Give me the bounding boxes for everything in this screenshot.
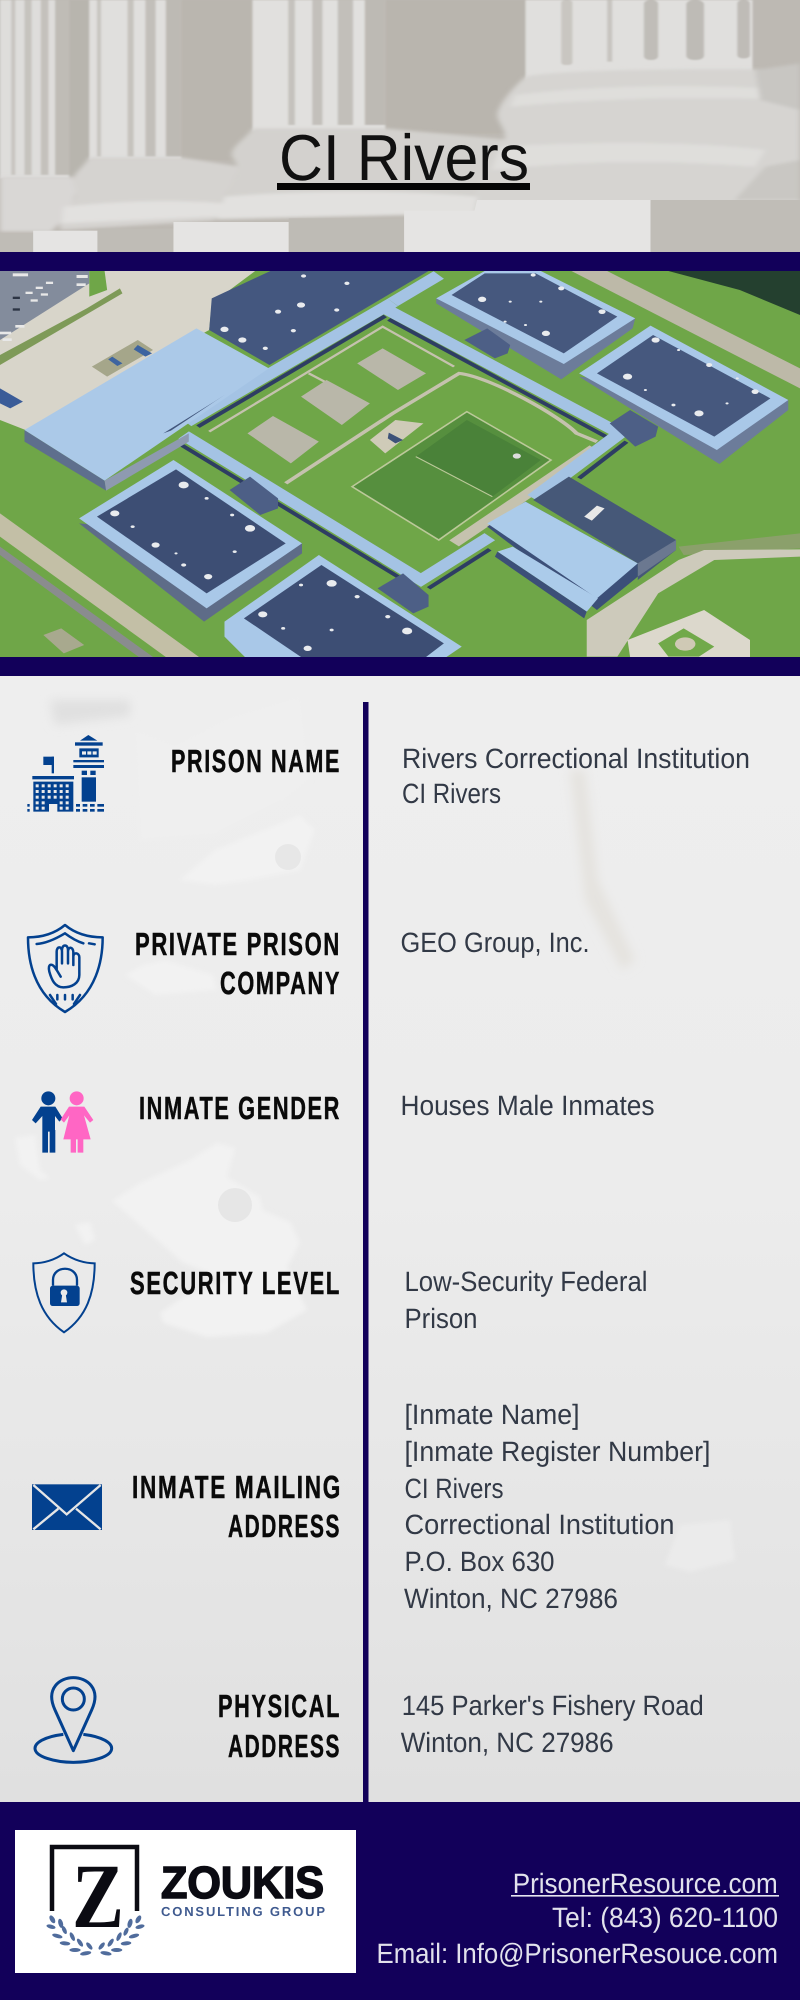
label: physical address: ADDRESS <box>228 1728 341 1764</box>
housing block NE2 <box>579 326 788 464</box>
value: security level: Prison <box>404 1303 478 1334</box>
label: private prison company <box>135 926 341 1001</box>
value: physical address <box>401 1690 704 1758</box>
row: security level <box>33 1253 647 1334</box>
value: inmate mailing address: [Inmate Name] <box>404 1399 580 1430</box>
parked cars <box>0 273 88 341</box>
label: inmate mailing address: ADDRESS <box>228 1508 341 1544</box>
value: physical address: 145 Parker's Fishery Road <box>402 1690 704 1721</box>
icon: envelope <box>32 1484 102 1530</box>
label: inmate mailing address: INMATE MAILING <box>132 1469 342 1505</box>
row: inmate gender <box>32 1090 654 1153</box>
column bases <box>0 63 800 232</box>
housing block SW2 <box>224 555 462 657</box>
row: private prison company <box>28 925 590 1012</box>
label: private prison company: COMPANY <box>220 965 341 1001</box>
icon: prison building and watchtower <box>27 735 104 812</box>
paper-textured information panel <box>0 676 800 1802</box>
value: prison name: CI Rivers <box>402 778 501 809</box>
sports field <box>352 412 551 540</box>
row: physical address <box>35 1678 704 1764</box>
column 3 <box>253 0 385 132</box>
contact details: PrisonerResource.com <box>513 1868 778 1899</box>
column 4 <box>526 0 753 80</box>
administration roof <box>24 328 269 481</box>
small annex buildings <box>230 328 658 613</box>
column 1 <box>0 0 69 178</box>
corridors shadow <box>176 316 627 588</box>
value: private prison company: GEO Group, Inc. <box>400 927 590 958</box>
yard paths <box>209 327 597 543</box>
value: physical address: Winton, NC 27986 <box>401 1727 614 1758</box>
value: inmate mailing address: [Inmate Register Number] <box>404 1436 710 1467</box>
dark-roof housing block top center <box>209 271 429 365</box>
plinths <box>0 233 33 252</box>
south-west perimeter <box>0 513 199 657</box>
contact details: Tel: (843) 620-1100 <box>552 1902 778 1933</box>
logo letter Z: Z <box>72 1845 124 1947</box>
label: private prison company: PRIVATE PRISON <box>135 926 341 962</box>
value: security level: Low-Security Federal <box>404 1266 648 1297</box>
baseball diamond <box>628 610 750 657</box>
value: prison name: Rivers Correctional Institution <box>402 743 750 774</box>
navy band below photo <box>0 657 800 676</box>
value: inmate mailing address: Correctional Institution <box>404 1509 674 1540</box>
label: security level: SECURITY LEVEL <box>130 1265 341 1301</box>
logo: Zoukis Consulting Group <box>15 1830 356 1973</box>
icon: male and female figures <box>32 1091 93 1153</box>
vertical divider <box>363 702 368 1802</box>
footer <box>0 1802 800 2000</box>
label: physical address <box>218 1688 341 1764</box>
title: CI Rivers: CI Rivers <box>279 121 529 194</box>
corridors <box>184 275 620 580</box>
value: inmate mailing address <box>404 1399 710 1614</box>
ground <box>0 271 255 430</box>
housing block NE1 <box>436 271 635 379</box>
value: inmate mailing address: P.O. Box 630 <box>404 1546 554 1577</box>
icon: shield with padlock <box>33 1253 95 1332</box>
contact details: Email: Info@PrisonerResouce.com <box>376 1938 778 1969</box>
icon: shield with raised hand <box>28 925 103 1012</box>
courts <box>247 348 426 463</box>
label: physical address: PHYSICAL <box>218 1688 341 1724</box>
header background: courthouse columns <box>0 0 800 252</box>
east service buildings <box>487 477 676 618</box>
logo tagline: CONSULTING GROUP <box>161 1904 325 1919</box>
contact details <box>376 1868 779 1969</box>
logo laurel <box>46 1914 145 1956</box>
administration building wall <box>24 430 106 491</box>
logo wordmark: ZOUKIS <box>161 1857 324 1908</box>
label: inmate mailing address <box>132 1469 342 1544</box>
navy band above photo <box>0 252 800 271</box>
icon: map pin <box>35 1678 112 1762</box>
logo frame <box>52 1847 137 1911</box>
label: prison name: PRISON NAME <box>171 743 341 779</box>
column 2 <box>89 0 181 160</box>
value: prison name <box>402 743 750 809</box>
value: inmate gender: Houses Male Inmates <box>400 1090 654 1121</box>
value: security level <box>404 1266 648 1334</box>
aerial photo of prison <box>0 271 800 657</box>
value: inmate mailing address: Winton, NC 27986 <box>404 1583 618 1614</box>
row: prison name <box>27 735 750 812</box>
housing block SW1 <box>79 460 302 622</box>
row: inmate mailing address <box>32 1399 710 1614</box>
label: inmate gender: INMATE GENDER <box>139 1090 341 1126</box>
value: inmate mailing address: CI Rivers <box>404 1473 504 1504</box>
roof details <box>110 273 759 651</box>
